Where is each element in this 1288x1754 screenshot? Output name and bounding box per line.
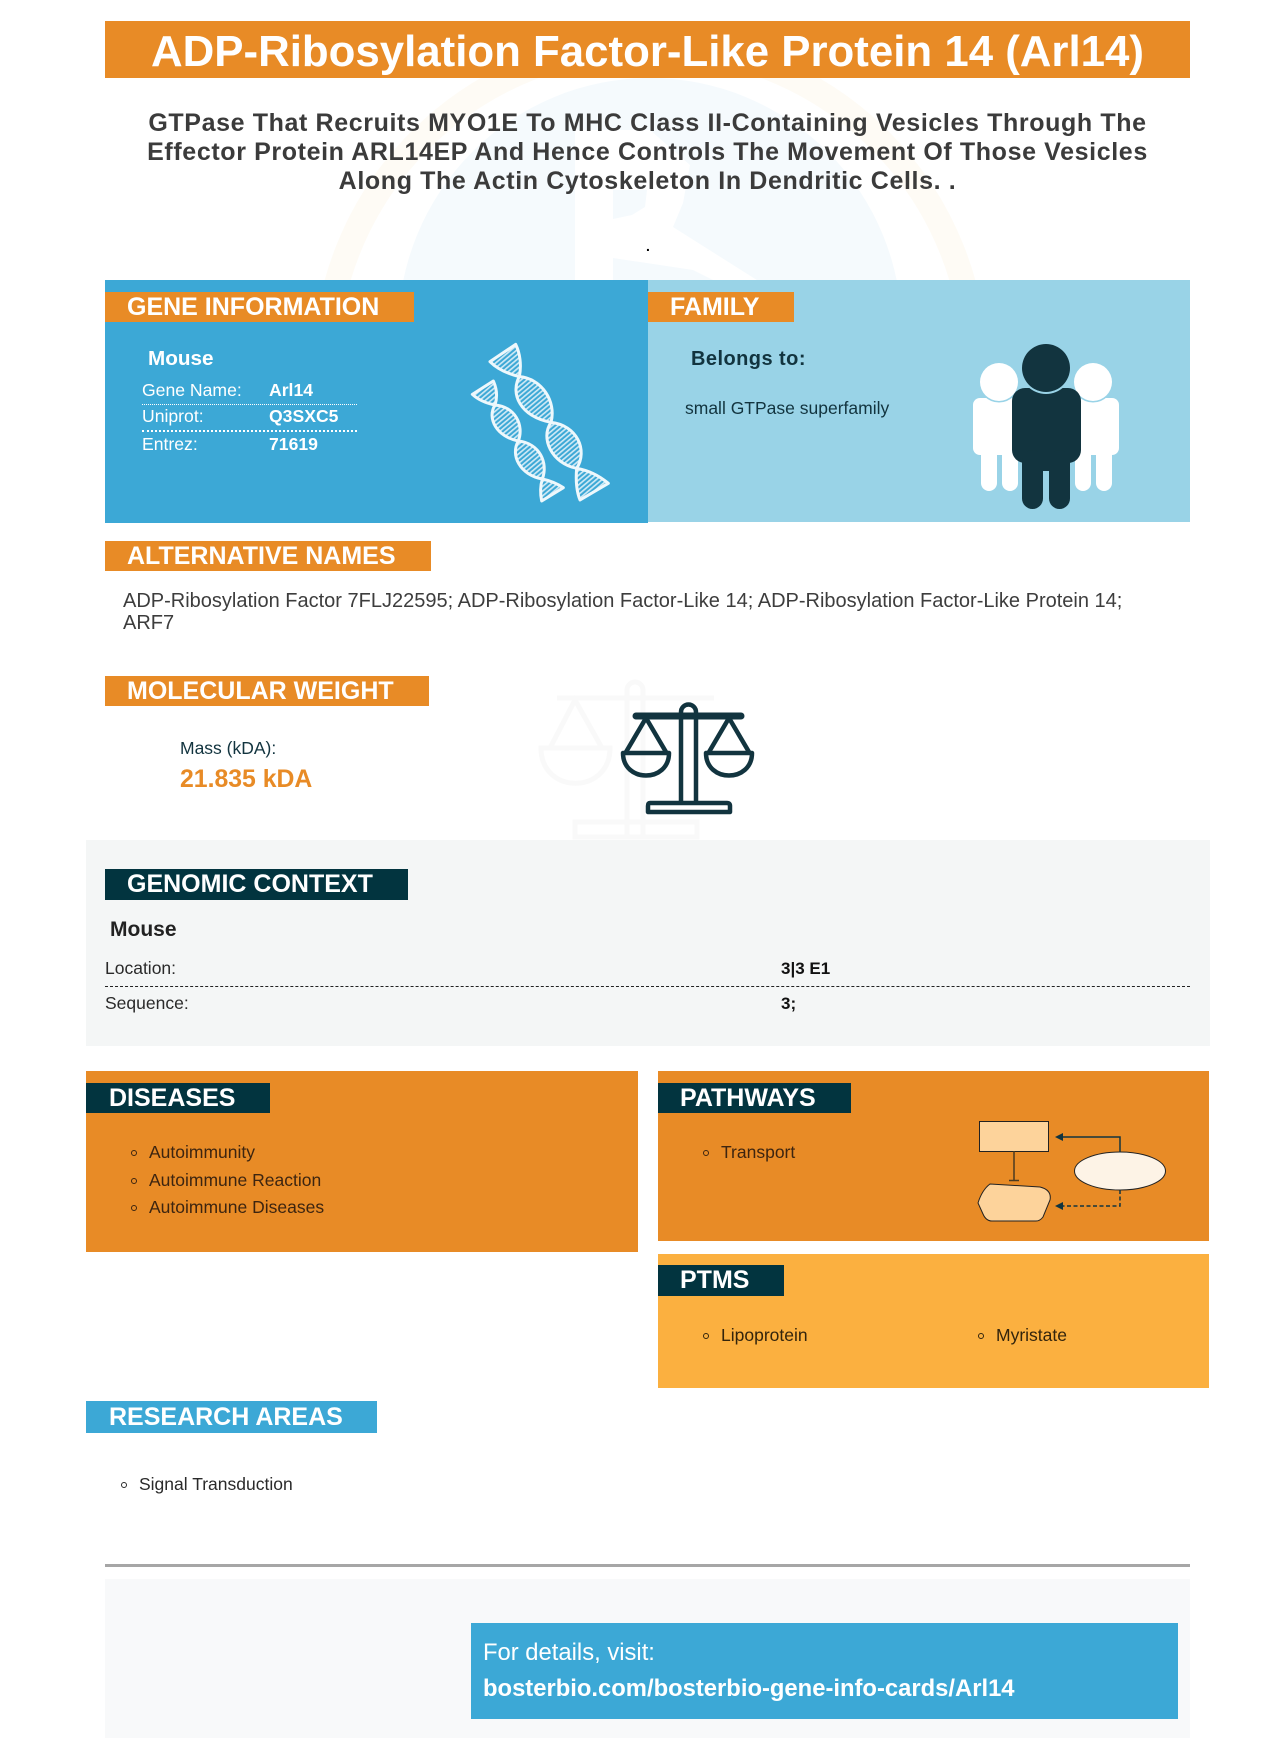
list: diseases: Autoimmune Diseases bbox=[149, 1197, 324, 1217]
heading: genomic context: GENOMIC CONTEXT bbox=[127, 870, 373, 898]
heading: alternative names: ALTERNATIVE NAMES bbox=[127, 542, 396, 570]
list: research areas: Signal Transduction bbox=[139, 1474, 293, 1494]
subtitle description: Effector Protein ARL14EP And Hence Controls The Movement Of Those Vesicles bbox=[147, 138, 1148, 166]
subtitle description: GTPase That Recruits MYO1E To MHC Class II-Containing Vesicles Through The bbox=[148, 109, 1147, 137]
gene name row: Gene Name: bbox=[142, 380, 242, 400]
gene name row: Arl14 bbox=[269, 380, 313, 400]
icon: balance scale bbox=[620, 702, 754, 814]
title banner bbox=[105, 21, 1190, 78]
list: diseases bbox=[131, 1142, 324, 1217]
panel: footer bbox=[105, 1579, 1190, 1738]
panel: pathways bbox=[658, 1071, 1209, 1241]
list item: myristate: Myristate bbox=[996, 1325, 1067, 1345]
panel: PTMs bbox=[658, 1254, 1209, 1388]
heading: pathways: PATHWAYS bbox=[680, 1084, 816, 1112]
sequence row: Sequence: bbox=[105, 993, 189, 1013]
heading: research areas: RESEARCH AREAS bbox=[109, 1403, 343, 1431]
uniprot row: Uniprot: bbox=[142, 406, 204, 426]
gene name row bbox=[142, 380, 357, 405]
subtitle description bbox=[147, 109, 1148, 195]
background watermark logo bbox=[325, 78, 975, 280]
species label: Mouse bbox=[148, 347, 214, 370]
list: pathways: Transport bbox=[721, 1142, 795, 1162]
heading: PTMs: PTMS bbox=[680, 1266, 749, 1294]
belongs to label: Belongs to: bbox=[691, 348, 806, 370]
uniprot row bbox=[142, 406, 357, 432]
panel: family bbox=[648, 280, 1190, 522]
icon: faded balance scale bbox=[530, 675, 730, 840]
icon: DNA double helix bbox=[470, 342, 610, 502]
list item: lipoprotein: Lipoprotein bbox=[721, 1325, 808, 1345]
heading: family: FAMILY bbox=[670, 293, 759, 321]
heading: family bbox=[648, 292, 794, 322]
divider rule bbox=[105, 1564, 1190, 1567]
location row: 3|3 E1 bbox=[781, 959, 830, 978]
title text: ADP-Ribosylation Factor-Like Protein 14 (Arl14) bbox=[151, 27, 1144, 76]
entrez row: Entrez: bbox=[142, 434, 198, 454]
mass value: 21.835 kDA bbox=[180, 766, 312, 793]
mass label: Mass (kDA): bbox=[180, 738, 276, 758]
subtitle description: Along The Actin Cytoskeleton In Dendritic Cells. . bbox=[339, 167, 956, 195]
callout label: For details, visit: bbox=[483, 1639, 655, 1666]
heading: diseases bbox=[86, 1083, 270, 1113]
list: diseases: Autoimmune Reaction bbox=[149, 1170, 321, 1190]
heading: pathways bbox=[658, 1083, 851, 1113]
sequence row bbox=[105, 993, 796, 1013]
panel: gene information bbox=[105, 280, 648, 523]
icon: group of people bbox=[973, 344, 1119, 509]
heading: diseases: DISEASES bbox=[109, 1084, 235, 1112]
heading: gene information: GENE INFORMATION bbox=[127, 293, 379, 321]
icon: pathway diagram bbox=[978, 1121, 1166, 1222]
location row bbox=[105, 955, 1190, 987]
entrez row bbox=[142, 434, 318, 454]
heading: PTMs bbox=[658, 1265, 784, 1296]
sequence row: 3; bbox=[781, 994, 796, 1013]
panel: diseases bbox=[86, 1071, 638, 1252]
entrez row: 71619 bbox=[269, 434, 318, 454]
location row: Location: bbox=[105, 958, 176, 978]
panel: genomic context bbox=[86, 840, 1210, 1046]
list: diseases: Autoimmunity bbox=[149, 1142, 255, 1162]
uniprot row: Q3SXC5 bbox=[269, 406, 338, 426]
species label: Mouse bbox=[110, 918, 177, 941]
callout: details link bbox=[471, 1623, 1178, 1719]
alternative names text: ADP-Ribosylation Factor 7FLJ22595; ADP-Ribosylation Factor-Like 14; ADP-Ribosylation Factor-Like Protein 14; ARF7 bbox=[123, 590, 1122, 634]
family value: small GTPase superfamily bbox=[685, 398, 889, 418]
callout URL: bosterbio.com/bosterbio-gene-info-cards/Arl14 bbox=[483, 1675, 1015, 1702]
small dot: . bbox=[646, 238, 650, 254]
heading: molecular weight: MOLECULAR WEIGHT bbox=[127, 677, 394, 705]
